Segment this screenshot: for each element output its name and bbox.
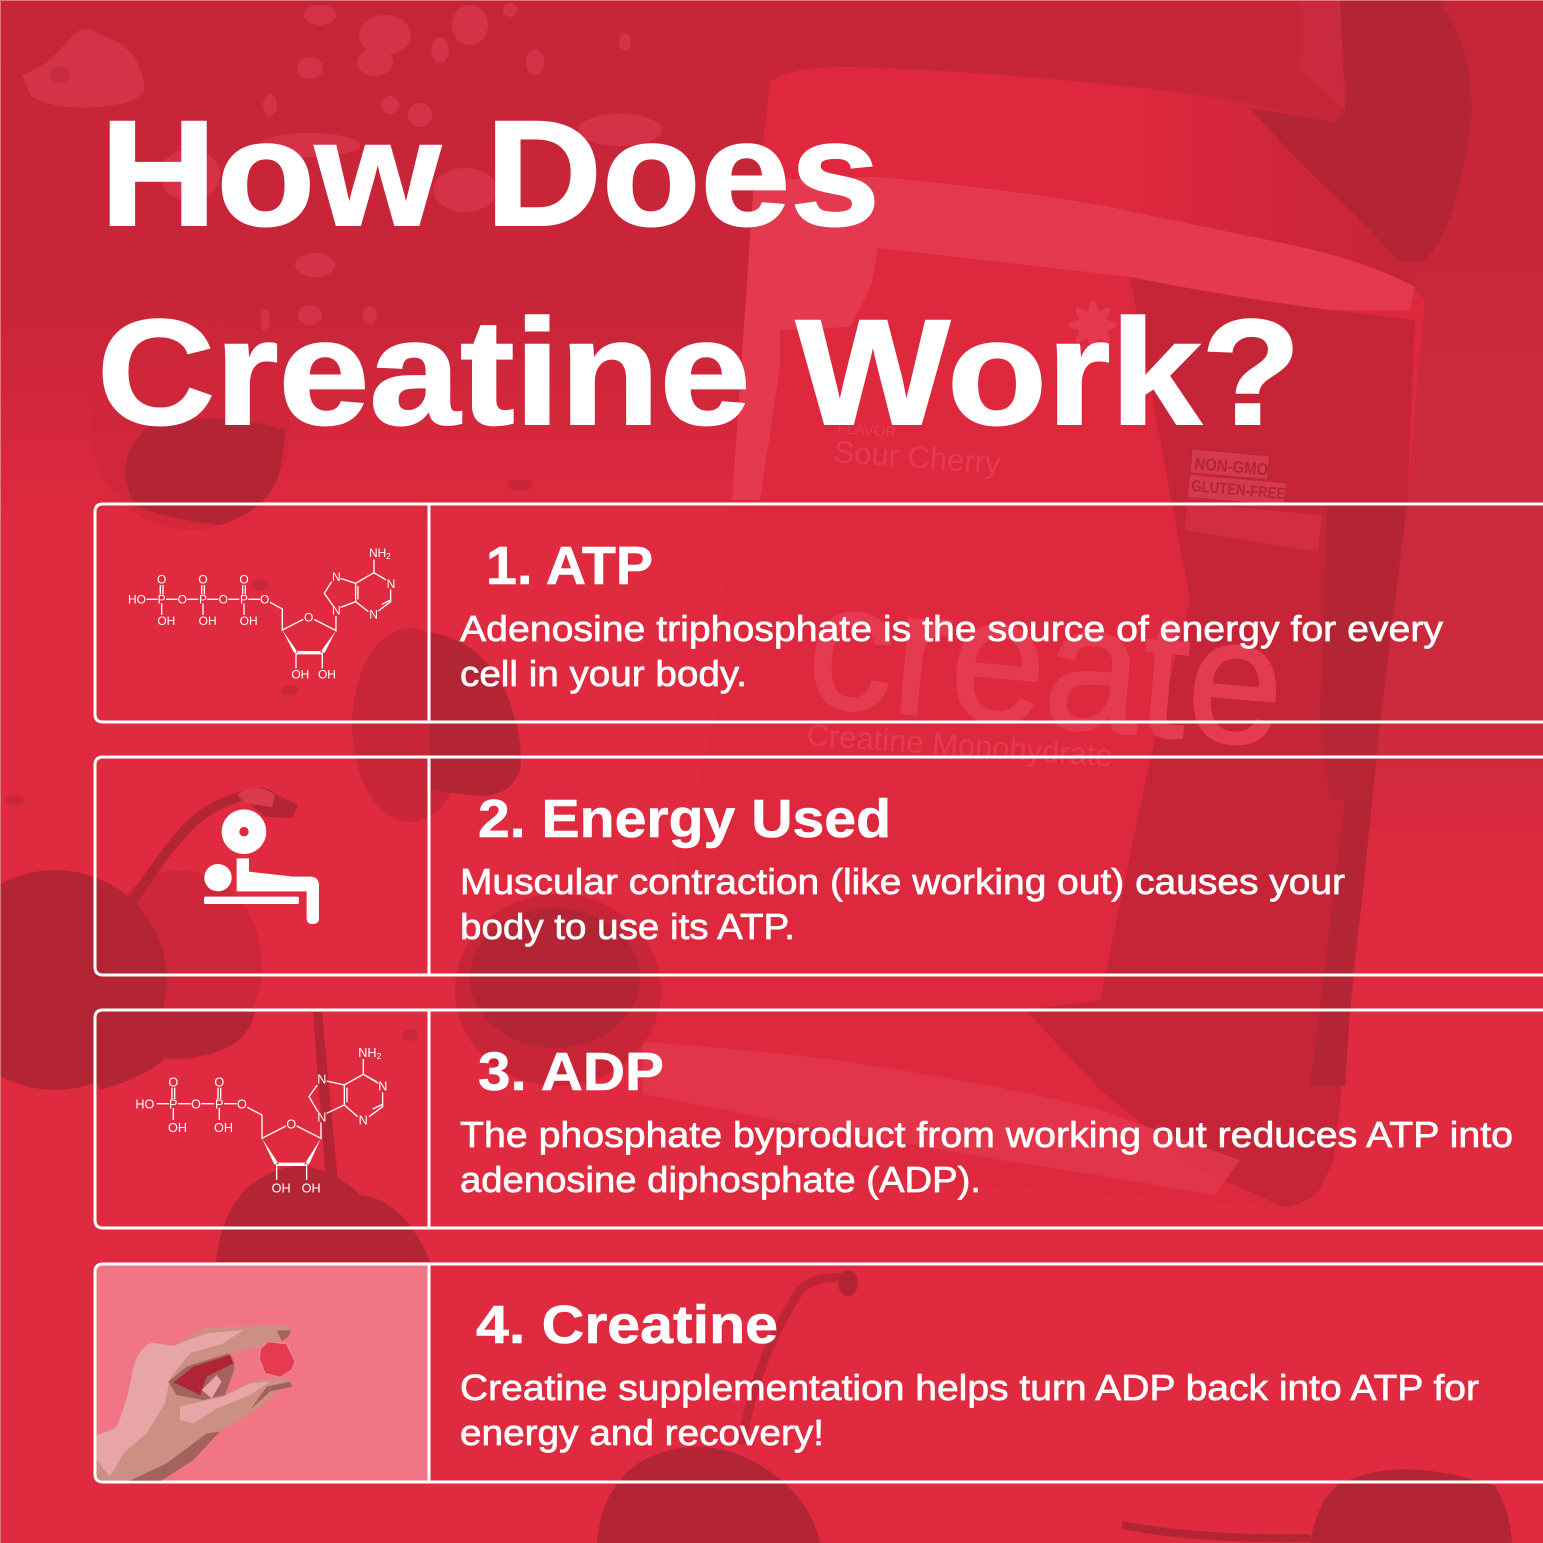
heading: 2. Energy Used bbox=[478, 789, 891, 849]
icon: ATP molecule: O bbox=[239, 573, 249, 587]
icon: ADP molecule bbox=[135, 1046, 387, 1195]
icon: ADP molecule: OH bbox=[168, 1121, 187, 1135]
jar label text: FLAVOR bbox=[837, 420, 897, 441]
icon: ATP molecule: OH bbox=[291, 668, 309, 682]
icon: hand holding pill bbox=[97, 1325, 295, 1481]
icon: ATP molecule: 2 bbox=[386, 552, 391, 561]
image tile: pink background bbox=[95, 1264, 429, 1482]
icon: ATP molecule: O bbox=[304, 611, 313, 625]
icon: ADP molecule: O bbox=[168, 1075, 178, 1089]
text block bbox=[460, 608, 1443, 694]
text block: body to use its ATP. bbox=[460, 906, 795, 947]
icon: ADP molecule: N bbox=[317, 1073, 326, 1087]
text block bbox=[460, 1367, 1479, 1453]
icon: ATP molecule: OH bbox=[199, 614, 217, 628]
icon: ADP molecule: O bbox=[237, 1098, 247, 1112]
icon: ATP molecule: OH bbox=[157, 614, 175, 628]
icon: ATP molecule: O bbox=[198, 573, 208, 587]
panel 1: ATP bbox=[95, 504, 1543, 722]
text block: Muscular contraction (like working out) causes your bbox=[460, 861, 1345, 902]
jar label text: Creatine Monohydrate bbox=[806, 717, 1114, 773]
icon: ADP molecule: O bbox=[214, 1075, 224, 1089]
text block: Creatine supplementation helps turn ADP back into ATP for bbox=[460, 1367, 1479, 1408]
icon: ATP molecule: P bbox=[240, 593, 248, 607]
text block bbox=[460, 1114, 1513, 1200]
text block: The phosphate byproduct from working out reduces ATP into bbox=[460, 1114, 1513, 1155]
text block bbox=[460, 861, 1345, 947]
icon: ATP molecule: N bbox=[332, 603, 341, 617]
heading: 3. ADP bbox=[478, 1042, 664, 1102]
icon: ATP molecule: O bbox=[260, 593, 269, 607]
jar body bbox=[640, 180, 1425, 1207]
jar label text: NON-GMO bbox=[1194, 454, 1269, 479]
jar lid bbox=[752, 67, 1421, 310]
title: How Does bbox=[100, 89, 880, 257]
jar light band bbox=[732, 177, 1415, 500]
fruit fragments bbox=[22, 3, 662, 331]
icon: ADP molecule: 2 bbox=[377, 1051, 382, 1061]
icon: ADP molecule: O bbox=[191, 1098, 201, 1112]
jar label text: Sour Cherry bbox=[833, 434, 1002, 481]
icon: ATP molecule: O bbox=[219, 593, 228, 607]
icon: ADP molecule: N bbox=[317, 1110, 326, 1124]
text block: Adenosine triphosphate is the source of energy for every bbox=[460, 608, 1443, 649]
icon: ADP molecule: N bbox=[378, 1080, 387, 1094]
icon: ADP molecule: P bbox=[215, 1098, 223, 1112]
icon: ATP molecule: HO bbox=[128, 593, 146, 607]
heading: 4. Creatine bbox=[476, 1295, 778, 1355]
panel 4: Creatine bbox=[95, 1264, 1543, 1482]
icon: ATP molecule: NH bbox=[369, 546, 386, 560]
jar label text: create bbox=[801, 544, 1292, 785]
icon: ATP molecule: OH bbox=[318, 668, 336, 682]
icon: ATP molecule: N bbox=[387, 577, 395, 591]
icon: ADP molecule: N bbox=[359, 1114, 368, 1128]
icon: ATP molecule: OH bbox=[240, 614, 258, 628]
title bbox=[97, 89, 1301, 456]
icon: ATP molecule: P bbox=[158, 593, 166, 607]
icon: bench press bbox=[204, 809, 319, 924]
icon: ATP molecule: N bbox=[369, 608, 378, 622]
text block: energy and recovery! bbox=[460, 1412, 824, 1453]
jar label text: GLUTEN-FREE bbox=[1191, 478, 1286, 503]
dark fruit behind lid bbox=[1250, 0, 1471, 262]
icon: ADP molecule: OH bbox=[272, 1181, 291, 1195]
icon: ATP molecule: O bbox=[178, 593, 187, 607]
icon: ATP molecule: N bbox=[332, 570, 341, 584]
icon: ATP molecule bbox=[128, 546, 395, 682]
heading: 1. ATP bbox=[486, 536, 653, 596]
text block: cell in your body. bbox=[460, 653, 747, 694]
icon: ATP molecule: P bbox=[199, 593, 207, 607]
icon: ATP molecule: O bbox=[157, 573, 166, 587]
jar body shaded side bbox=[1026, 277, 1415, 1207]
icon: ADP molecule: OH bbox=[214, 1121, 233, 1135]
icon: ADP molecule: P bbox=[169, 1098, 177, 1112]
panel 3: ADP bbox=[95, 1010, 1543, 1228]
icon: ADP molecule: NH bbox=[358, 1046, 377, 1060]
cherries bbox=[90, 320, 290, 530]
text block: adenosine diphosphate (ADP). bbox=[460, 1159, 981, 1200]
title: Creatine Work? bbox=[97, 288, 1301, 456]
icon: ADP molecule: OH bbox=[302, 1181, 321, 1195]
panel 2: Energy Used bbox=[95, 757, 1543, 975]
pill bbox=[259, 1342, 295, 1377]
icon: ADP molecule: HO bbox=[135, 1098, 154, 1112]
jar label text bbox=[801, 300, 1292, 785]
icon: ADP molecule: O bbox=[286, 1117, 296, 1131]
